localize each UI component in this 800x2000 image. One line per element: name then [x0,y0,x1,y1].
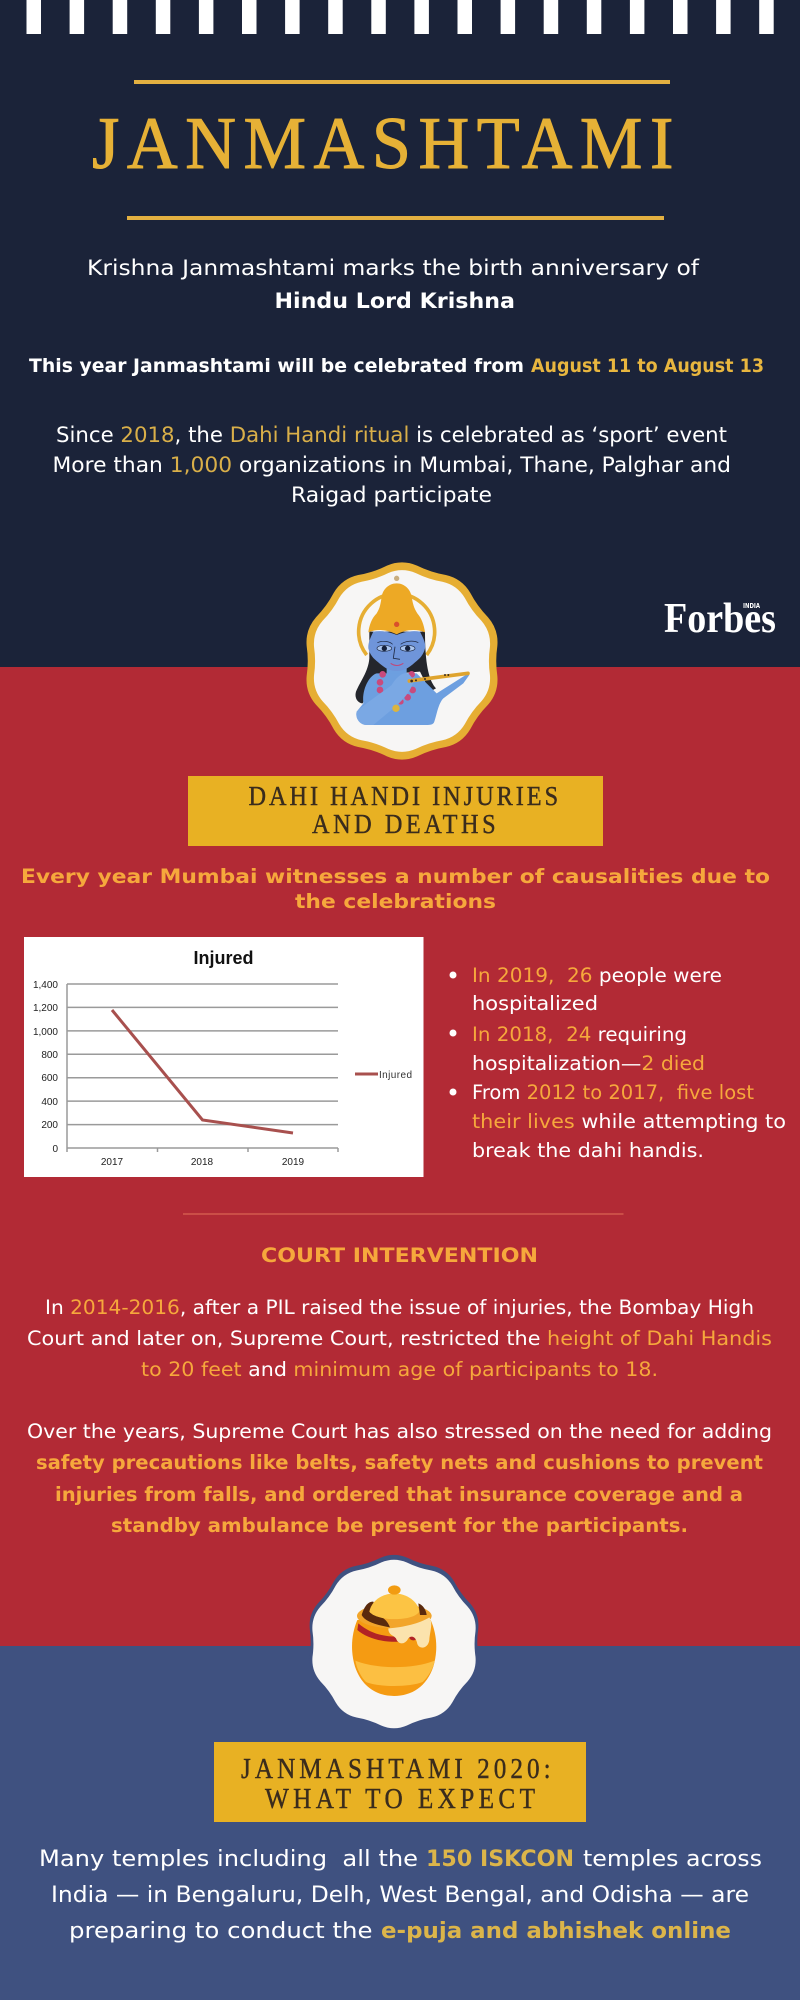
bullet list: casualty facts: break the dahi handis. [472,1139,704,1162]
panel: injuries background [0,667,800,1646]
line chart: injured: 600 [41,1073,58,1084]
text block: temples and e-puja: India — in Bengaluru, Delh, West Bengal, and Odisha — are [51,1882,749,1908]
icon: Krishna badge [306,562,498,760]
text block: temples and e-puja: preparing to conduct the [69,1918,372,1944]
text block: court restrictions: Court and later on, Supreme Court, restricted the height of Dahi Handis [27,1327,772,1350]
line chart: injured: 200 [41,1120,58,1131]
subheading: casualties: Every year Mumbai witnesses a number of causalities due to [21,865,770,888]
subheading: casualties: the celebrations [295,890,496,913]
intro text: dates [29,355,764,377]
line chart: injured: 2019 [282,1157,305,1168]
text block: temples and e-puja [39,1846,762,1944]
text block: safety precautions [27,1420,772,1537]
heading box: what to expect: WHAT TO EXPECT [265,1783,535,1814]
intro text: birth anniversary [87,256,700,313]
title with rules [92,80,673,220]
intro text: birth anniversary: Krishna Janmashtami marks the birth anniversary of [87,256,700,280]
intro text: sport event: More than 1,000 organizations in Mumbai, Thane, Palghar and [52,453,731,477]
line chart: injured: 400 [41,1097,58,1108]
text block: safety precautions: safety precautions like belts, safety nets and cushions to prevent [36,1451,763,1474]
heading box: injuries and deaths [188,776,603,846]
line chart: injured: 0 [52,1144,58,1155]
intro text: sport event [52,423,731,507]
text block: court restrictions: In 2014-2016, after a PIL raised the issue of injuries, the Bombay High [45,1296,754,1319]
text block: safety precautions: standby ambulance be present for the participants. [111,1514,688,1537]
text block: safety precautions: Over the years, Supreme Court has also stressed on the need for adding [27,1420,772,1443]
line chart: injured: 1,200 [33,1003,58,1014]
line chart: injured: Injured [193,948,254,968]
heading box: what to expect [214,1742,586,1822]
line chart: injured: 1,400 [33,980,58,991]
text block: court restrictions: to 20 feet and minimum age of participants to 18. [141,1358,658,1381]
text block: temples and e-puja: temples across [583,1846,762,1872]
text block: court restrictions [27,1296,772,1381]
logo: Forbes India: Forbes [664,596,776,642]
intro text: sport event: Raigad participate [291,483,492,507]
line chart: injured: 2017 [101,1157,124,1168]
bullet list: casualty facts [450,964,786,1162]
heading box: what to expect: JANMASHTAMI 2020: [241,1753,551,1784]
panel: intro background [0,0,800,667]
line chart: injured: 1,000 [33,1027,58,1038]
bullet list: casualty facts: In 2018, 24 requiring [472,1023,687,1046]
top stripe border [26,0,774,34]
panel: 2020 background [0,1646,800,2000]
bullet list: casualty facts: their lives while attempting to [472,1110,786,1133]
line chart: injured: 800 [41,1050,58,1061]
icon: dahi handi pot badge [310,1555,478,1729]
intro text: dates: August 11 to August 13 [531,355,764,377]
heading: court intervention: COURT INTERVENTION [261,1244,538,1267]
intro text: birth anniversary: Hindu Lord Krishna [274,289,515,313]
intro text: dates: This year Janmashtami will be celebrated from [29,355,524,377]
text block: temples and e-puja: Many temples including all the [39,1846,418,1872]
text block: temples and e-puja: 150 ISKCON [426,1846,574,1872]
bullet list: casualty facts: hospitalized [472,992,598,1015]
intro text: sport event: Since 2018, the Dahi Handi ritual is celebrated as ‘sport’ event [56,423,727,447]
line chart: injured [24,937,424,1177]
bullet list: casualty facts: hospitalization— 2 died [472,1052,705,1075]
bullet list: casualty facts: From 2012 to 2017, five lost [472,1081,754,1104]
heading box: injuries and deaths: DAHI HANDI INJURIES [248,781,558,811]
text block: temples and e-puja: e-puja and abhishek online [381,1918,731,1944]
bullet list: casualty facts: In 2019, 26 people were [472,964,722,987]
text block: safety precautions: injuries from falls, and ordered that insurance coverage and a [55,1483,743,1506]
line chart: injured: 2018 [191,1157,214,1168]
subheading: casualties [21,865,770,913]
line chart: injured: Injured [379,1070,412,1081]
logo: Forbes India: INDIA [743,602,760,610]
heading box: injuries and deaths: AND DEATHS [312,809,496,839]
title with rules: JANMASHTAMI [92,102,673,184]
